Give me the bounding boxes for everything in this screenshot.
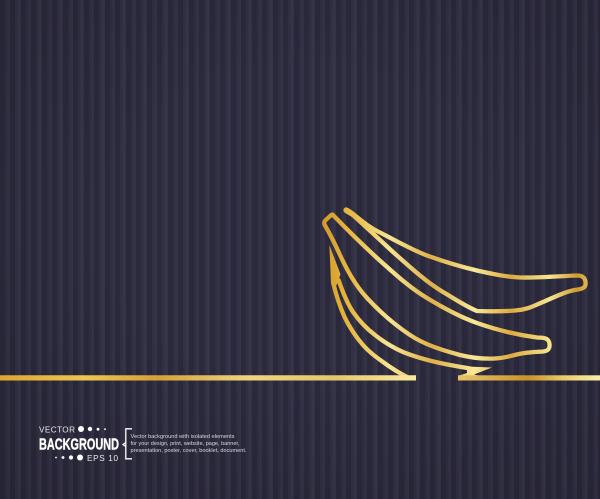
middle banana outline [324, 215, 550, 359]
dots: lower row [55, 454, 83, 460]
bottom banana outer edge [333, 282, 410, 378]
description text [130, 434, 247, 454]
description text: for your design, print, website, page, banner, [130, 441, 240, 447]
bottom banana inner edge [338, 280, 470, 368]
left gold horizon line [0, 375, 416, 380]
dots: upper row [78, 426, 106, 432]
banana tip wedge and notch [329, 245, 492, 380]
word: VECTOR: VECTOR [39, 425, 75, 434]
description text: presentation, poster, cover, booklet, document. [130, 448, 247, 454]
word: BACKGROUND: BACKGROUND [39, 436, 119, 454]
description text: Vector background with isolated elements [130, 434, 235, 440]
bracket [123, 429, 132, 459]
word: EPS 10: EPS 10 [87, 454, 118, 463]
logo: vector background eps 10 [39, 425, 119, 463]
top banana outline [346, 210, 586, 311]
icon: gold line banana bunch [324, 210, 586, 378]
right gold horizon line [458, 375, 600, 380]
